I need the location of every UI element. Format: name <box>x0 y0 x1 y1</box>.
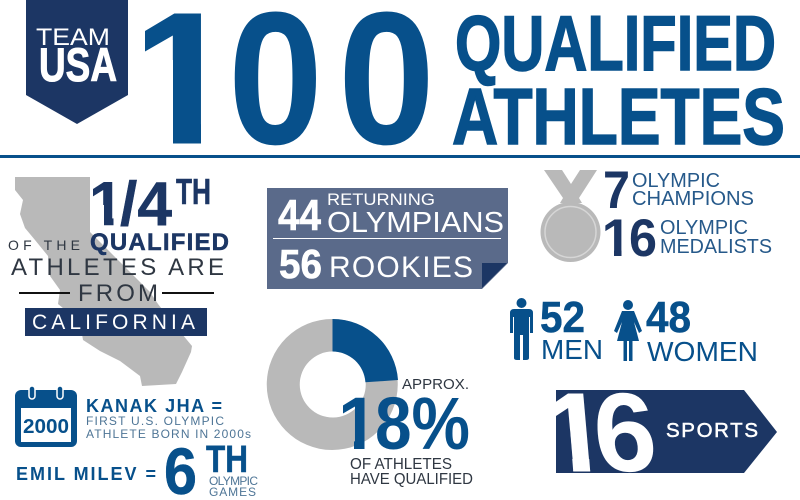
approx: APPROX. <box>402 376 469 393</box>
panel: emil milev <box>16 434 258 500</box>
icon: woman <box>614 300 642 361</box>
team usa banner <box>26 0 128 124</box>
icon: medal <box>540 170 600 262</box>
panel: men and women <box>510 293 758 367</box>
panel: returning and rookies <box>267 188 508 289</box>
icon: calendar <box>15 386 77 447</box>
16: 1 <box>602 209 631 268</box>
california map <box>15 177 192 386</box>
champions: CHAMPIONS <box>632 188 754 210</box>
one quarter figure: 1 <box>89 170 123 239</box>
of athletes: OF ATHLETES <box>350 456 452 473</box>
rookies: ROOKIES <box>329 251 473 284</box>
california label: CALIFORNIA <box>32 311 195 334</box>
games: GAMES <box>209 485 256 499</box>
18 percent: 8% <box>375 382 470 465</box>
have qualified: HAVE QUALIFIED <box>350 471 473 488</box>
qualified: QUALIFIED <box>90 229 229 256</box>
52: 52 <box>540 293 585 342</box>
icon: calendar: 2000 <box>23 416 69 438</box>
16: 6 <box>629 209 657 268</box>
superscript th: TH <box>176 171 211 212</box>
icon: man <box>510 298 533 360</box>
panel: kanak jha <box>15 386 251 447</box>
panel: olympic medals <box>540 170 772 262</box>
first olympic athlete: FIRST U.S. OLYMPIC <box>86 414 224 428</box>
athletes are: ATHLETES ARE <box>11 254 224 281</box>
returning: RETURNING <box>327 190 435 209</box>
18 percent: 1 <box>336 382 380 465</box>
team usa banner: TEAM <box>36 24 110 51</box>
18 percent <box>343 396 468 450</box>
olympic: OLYMPIC <box>632 170 720 192</box>
big number 100 <box>145 12 428 146</box>
16: 1 <box>539 369 612 495</box>
44: 44 <box>278 191 321 240</box>
panel: percent qualified <box>267 319 473 488</box>
16: 6 <box>588 369 661 495</box>
olympians: OLYMPIANS <box>327 207 504 239</box>
olympic: OLYMPIC <box>660 217 748 239</box>
donut chart <box>267 319 398 450</box>
48: 48 <box>646 293 691 342</box>
one quarter figure <box>93 180 172 226</box>
16 <box>605 219 656 256</box>
16 <box>556 392 654 472</box>
women: WOMEN <box>647 336 758 367</box>
sports: SPORTS <box>666 419 758 442</box>
7: 7 <box>603 161 630 220</box>
team usa banner: USA <box>39 38 117 91</box>
kanak jha name: KANAK JHA = <box>86 396 222 416</box>
emil milev name: EMIL MILEV = <box>16 464 156 484</box>
panel: california stat <box>8 170 229 386</box>
panel: sports arrow <box>556 390 777 473</box>
one quarter figure: /4 <box>120 170 173 239</box>
from with rules: FROM <box>78 280 158 307</box>
fold corner <box>482 263 507 288</box>
of the: OF THE <box>8 237 80 253</box>
men: MEN <box>541 334 603 365</box>
olympic: OLYMPIC <box>209 474 258 488</box>
superscript th: TH <box>206 439 248 481</box>
born in 2000s: ATHLETE BORN IN 2000s <box>86 427 251 441</box>
header <box>26 0 783 146</box>
56: 56 <box>279 241 322 287</box>
medalists: MEDALISTS <box>660 236 772 258</box>
